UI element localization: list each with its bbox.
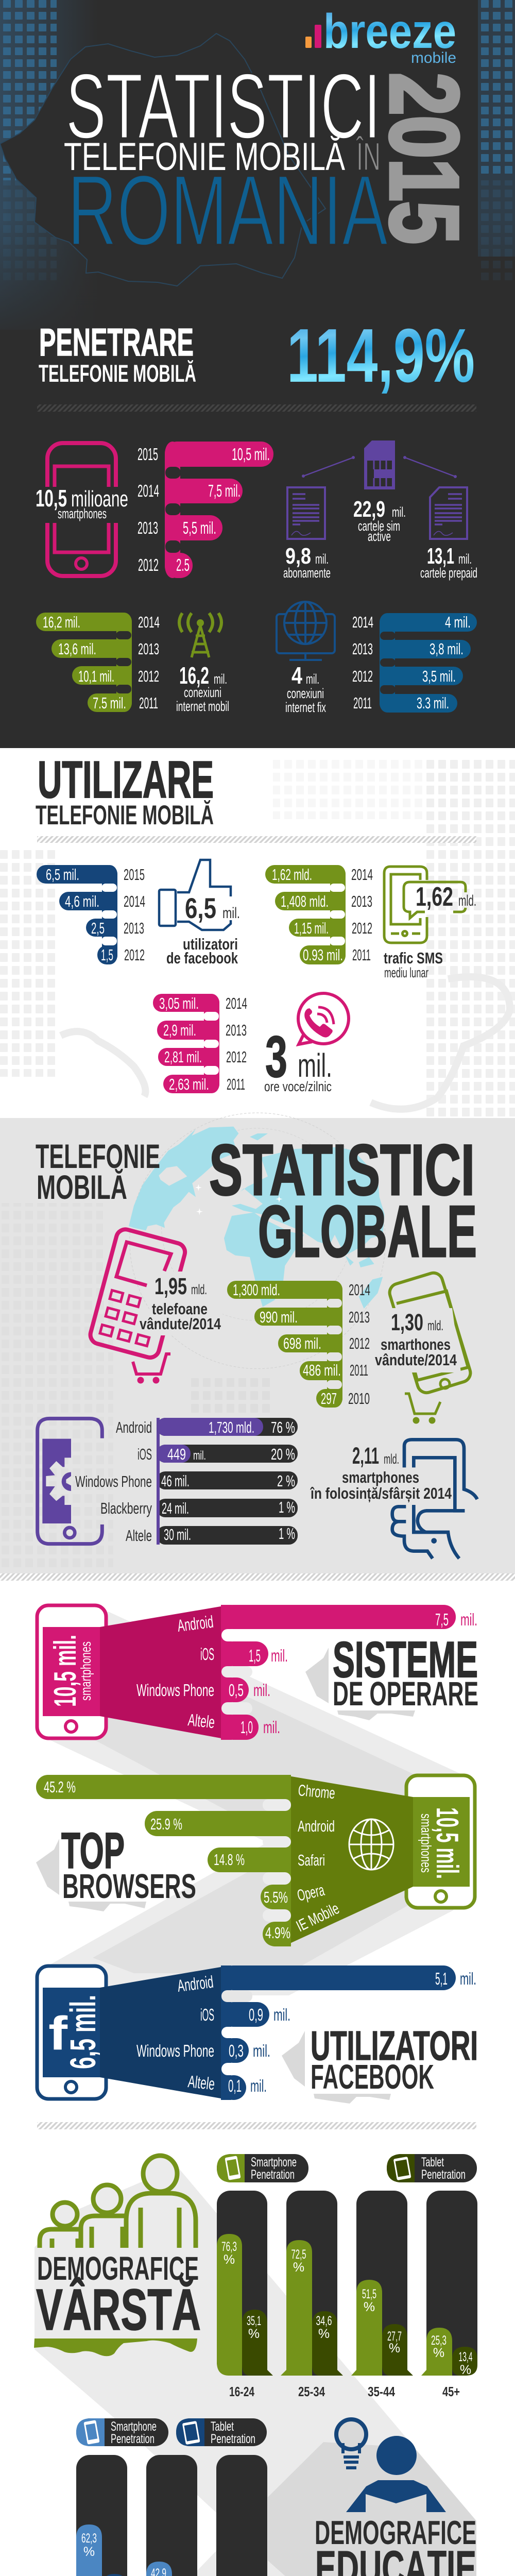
operating systems chart: 0,5 xyxy=(229,1681,244,1700)
operating systems chart: mil. xyxy=(253,1681,270,1700)
icon: phone call bubble xyxy=(298,993,349,1044)
text: smartphones in use: în folosință/sfârșit 2014 xyxy=(310,1484,452,1502)
legend: education chart: Smartphone xyxy=(111,2419,157,2434)
facebook chart: 5,1 xyxy=(435,1969,448,1988)
text: conexiuni internet fix: conexiuni xyxy=(287,686,324,701)
heading: demografice varsta: DEMOGRAFICE xyxy=(37,2250,199,2287)
bar chart: operating system share: 1,730 mld. xyxy=(209,1418,254,1436)
text: conexiuni internet fix xyxy=(285,662,326,715)
legend: age chart: Penetration xyxy=(251,2167,295,2182)
bar chart: age groups: 34,6 xyxy=(316,2314,332,2328)
bar chart: smartphones by year: 7,5 mil. xyxy=(208,481,241,500)
logo: breeze mobile xyxy=(305,4,456,66)
bar chart: smartphones by year: 2.5 xyxy=(176,555,190,574)
icon: globe on monitor xyxy=(277,602,335,660)
text: cartele prepaid: cartele prepaid xyxy=(420,565,477,581)
icon: phone with message bubble: mld. xyxy=(458,892,476,909)
map silhouette behind heading xyxy=(305,1648,415,1720)
facebook chart: mil. xyxy=(273,2005,290,2024)
heading: top browsers xyxy=(61,1822,196,1906)
bar chart: education: 62,3 xyxy=(81,2531,97,2546)
browsers chart: 14.8 % xyxy=(214,1851,245,1869)
bar chart: SMS traffic: 0.93 mil. xyxy=(303,946,343,964)
legend: education chart: Penetration xyxy=(111,2432,154,2446)
icon: smartphone with cart: mld. xyxy=(427,1318,443,1333)
text: utilizatori de facebook: de facebook xyxy=(166,949,238,967)
heading: telefonie mobila xyxy=(36,1137,160,1206)
title xyxy=(64,55,478,266)
text: trafic SMS: mediu lunar xyxy=(384,965,428,980)
browsers chart: 25.9 % xyxy=(150,1815,182,1833)
bar chart: voice traffic: 2,63 mil. xyxy=(169,1075,209,1093)
heading: utilizatori facebook: FACEBOOK xyxy=(311,2058,434,2096)
bar chart: mobile internet: 2013 xyxy=(138,640,159,658)
Romania map outline xyxy=(0,33,325,286)
map silhouette behind heading xyxy=(282,2031,391,2104)
bar chart: age groups: 35-44 xyxy=(368,2384,395,2399)
browsers chart: IE Mobile xyxy=(294,1899,342,1935)
bar chart: education xyxy=(76,2455,273,2576)
heading: penetrare: TELEFONIE MOBILĂ xyxy=(39,360,196,387)
text: cartele prepaid xyxy=(420,544,477,581)
icon: phone with message bubble: 1,62 xyxy=(416,882,453,912)
bar chart: operating system share: 1 % xyxy=(279,1498,295,1516)
legend: education chart: Tablet xyxy=(211,2419,234,2434)
heading: utilizatori facebook xyxy=(311,2023,478,2096)
icon: thumbs up with value xyxy=(159,860,240,930)
bar chart: facebook users by year: 2014 xyxy=(124,892,145,910)
title: TELEFONIE MOBILĂ xyxy=(64,135,345,179)
bar chart: fixed internet: 2012 xyxy=(352,667,373,685)
heading: utilizare: UTILIZARE xyxy=(38,751,214,809)
bar chart: smartphones by year: 2012 xyxy=(138,555,159,574)
bar chart: voice traffic: 3,05 mil. xyxy=(159,994,199,1012)
bar chart: smartphones sold: 486 mil. xyxy=(303,1361,341,1379)
text: 3 mil. ore voce / zilnic: ore voce/zilnic xyxy=(264,1079,332,1094)
icon: pink smartphone: smartphones xyxy=(78,1641,94,1701)
bar chart: age groups: 16-24 xyxy=(229,2384,254,2399)
title: ÎN xyxy=(356,135,381,179)
icon: feature phone with cart xyxy=(89,1227,222,1384)
text: utilizatori de facebook: utilizatori xyxy=(183,935,238,953)
bar chart: mobile internet: 13,6 mil. xyxy=(58,640,96,658)
text: cartele sim active: 22,9 xyxy=(353,497,385,522)
icon: thumbs up with value: mil. xyxy=(222,905,240,922)
bar chart: age groups: % xyxy=(460,2363,471,2377)
operating systems chart: Android xyxy=(176,1612,214,1635)
bar chart: smartphones sold: 2010 xyxy=(348,1389,370,1408)
icon: feature phone with cart: telefoane xyxy=(152,1300,208,1318)
bar chart: age groups: % xyxy=(224,2252,235,2267)
bar chart: fixed internet xyxy=(352,613,477,713)
icon: hand holding smartphone xyxy=(392,1439,477,1558)
operating systems chart: Altele xyxy=(187,1710,216,1732)
text: abonamente: abonamente xyxy=(283,565,331,581)
bar chart: smartphones by year: 10,5 mil. xyxy=(232,445,270,464)
map silhouette behind heading xyxy=(36,1839,146,1911)
bar chart: voice traffic: 2014 xyxy=(226,994,247,1012)
bar chart: operating system share: 76 % xyxy=(271,1418,295,1436)
bar chart: SMS traffic: 1,15 mil. xyxy=(294,919,329,937)
legend: age chart: Tablet xyxy=(421,2155,444,2170)
bar chart: mobile internet: 16,2 mil. xyxy=(43,613,80,631)
heading: telefonie mobila: MOBILĂ xyxy=(37,1168,127,1206)
bar chart: age groups: % xyxy=(248,2327,260,2341)
operating systems chart: iOS xyxy=(200,1645,214,1664)
icon: green smartphone: smartphones xyxy=(418,1814,434,1873)
legend: age chart: Penetration xyxy=(421,2167,466,2182)
bar chart: fixed internet: 4 mil. xyxy=(445,613,471,631)
bar chart: voice traffic: 2012 xyxy=(226,1048,247,1066)
bar chart: smartphones sold: 990 mil. xyxy=(260,1308,298,1326)
bar chart: fixed internet: 3.3 mil. xyxy=(417,694,449,712)
heading: statistici globale xyxy=(209,1129,477,1273)
heading: demografice varsta: VÂRSTĂ xyxy=(36,2277,201,2342)
bar chart: SMS traffic: 2011 xyxy=(352,946,371,964)
text: conexiuni internet mobil xyxy=(176,662,229,714)
browsers chart: 45.2 % xyxy=(44,1778,76,1796)
bar chart: operating system share xyxy=(75,1418,298,1545)
icon: family xyxy=(40,2156,196,2248)
bar chart: operating system share: 30 mil. xyxy=(164,1526,191,1544)
icon: SIM card with connectors xyxy=(302,440,457,489)
bar chart: smartphones by year xyxy=(138,442,273,578)
icon: prepaid document xyxy=(430,487,467,539)
bar chart: mobile internet: 2012 xyxy=(138,667,159,685)
browsers chart: Android xyxy=(298,1817,335,1835)
icon: pink smartphone: 10,5 mil. xyxy=(48,1635,82,1707)
panel: utilizare xyxy=(0,748,515,1118)
icon: smartphone outline with total: smartphones xyxy=(58,506,107,521)
panel: header and penetration, dark xyxy=(0,0,515,748)
text: cartele sim active: mil. xyxy=(392,504,406,520)
heading: telefonie mobila: TELEFONIE xyxy=(36,1137,160,1175)
text: cartele prepaid: 13,1 xyxy=(427,544,454,569)
operating systems chart: 1,5 xyxy=(249,1646,261,1665)
title: 2015 xyxy=(370,73,478,244)
bar chart: smartphones sold: 2014 xyxy=(349,1281,370,1299)
browsers chart: 4.9% xyxy=(265,1924,290,1942)
panel: statistici globale xyxy=(0,1113,515,1573)
heading: penetrare xyxy=(39,320,196,387)
bar chart: operating system share: Altele xyxy=(126,1527,152,1545)
operating systems chart xyxy=(37,1605,477,1740)
bar chart: smartphones sold: 698 mil. xyxy=(283,1334,321,1352)
facebook chart: mil. xyxy=(253,2041,270,2060)
bar chart: SMS traffic: 1,62 mld. xyxy=(272,866,312,884)
operating systems chart: 7,5 xyxy=(435,1610,449,1629)
bar chart: SMS traffic: 1,408 mld. xyxy=(281,892,329,910)
bar chart: age groups: 27,7 xyxy=(387,2329,402,2344)
icon: feature phone with cart: mld. xyxy=(191,1282,207,1297)
text: abonamente xyxy=(283,544,331,581)
legend: education chart xyxy=(76,2418,267,2446)
bar chart: fixed internet: 3,8 mil. xyxy=(430,640,464,658)
icon: smartphone with cart: 1,30 xyxy=(391,1309,423,1335)
bar chart: age groups: 45+ xyxy=(442,2384,460,2399)
bar chart: mobile internet xyxy=(36,613,160,712)
operating systems chart: mil. xyxy=(263,1718,280,1737)
text: conexiuni internet mobil: conexiuni xyxy=(184,685,221,700)
text: abonamente: mil. xyxy=(315,551,329,567)
text: abonamente: 9,8 xyxy=(285,544,311,569)
icon: contract document xyxy=(287,487,325,539)
operating systems chart: Windows Phone xyxy=(136,1681,214,1700)
bar chart: operating system share: 20 % xyxy=(271,1445,295,1463)
icon: smartphone outline with total: 10,5 xyxy=(36,485,67,512)
heading: demografice educatie xyxy=(315,2514,476,2576)
icon: green smartphone xyxy=(406,1775,475,1908)
bar chart: voice traffic xyxy=(153,994,247,1093)
text: smartphones in use: smartphones xyxy=(342,1468,419,1486)
bar chart: voice traffic: 2,81 mil. xyxy=(164,1048,202,1066)
panel: operating systems, browsers, facebook xyxy=(0,1581,515,2133)
bar chart: SMS traffic: 2013 xyxy=(351,892,372,910)
text: 3 mil. ore voce / zilnic: 3 xyxy=(265,1024,287,1090)
bar chart: smartphones by year: 2014 xyxy=(138,481,159,500)
icon: smartphone with cart xyxy=(373,1270,473,1424)
bar chart: fixed internet: 2013 xyxy=(352,640,373,658)
browsers chart xyxy=(36,1775,475,1946)
icon: smartphone with cart: vândute/2014 xyxy=(375,1351,457,1369)
text: conexiuni internet mobil: mil. xyxy=(214,671,227,687)
bar chart: facebook users by year: 2013 xyxy=(124,919,144,937)
bar chart: facebook users by year: 6,5 mil. xyxy=(46,866,79,884)
bar chart: smartphones sold: 2012 xyxy=(349,1334,370,1352)
icon: phone with message bubble xyxy=(384,867,476,943)
legend: age chart: Smartphone xyxy=(251,2155,297,2170)
bar chart: facebook users by year: 2,5 xyxy=(91,919,105,937)
icon: blue smartphone with f: 6,5 mil. xyxy=(63,1995,103,2069)
bar chart: age groups: 25,3 xyxy=(431,2333,447,2348)
bar chart: operating system share: Blackberry xyxy=(100,1499,152,1517)
bar chart: facebook users by year: 4,6 mil. xyxy=(65,892,99,910)
icon: pink smartphone xyxy=(37,1605,106,1738)
bar chart: age groups xyxy=(217,2191,477,2399)
bar chart: facebook users by year: 1,5 xyxy=(101,946,113,964)
bar chart: smartphones sold: 2011 xyxy=(350,1361,368,1379)
icon: antenna tower xyxy=(179,613,221,657)
icon: green smartphone: 10,5 mil. xyxy=(430,1807,465,1879)
bar chart: operating system share: 1 % xyxy=(279,1524,295,1543)
bar chart: smartphones sold: 297 xyxy=(321,1389,337,1408)
bar chart: age groups: 35,1 xyxy=(247,2314,261,2328)
text: smartphones in use: 2,11 xyxy=(352,1443,379,1469)
bar chart: voice traffic: 2,9 mil. xyxy=(163,1021,196,1039)
logo: breeze mobile: breeze xyxy=(323,4,456,59)
facebook chart: 0,3 xyxy=(229,2041,244,2060)
operating systems chart: mil. xyxy=(271,1646,288,1665)
browsers chart: Safari xyxy=(298,1851,325,1869)
facebook chart: mil. xyxy=(250,2076,267,2095)
operating systems chart: mil. xyxy=(460,1610,477,1629)
text: utilizatori de facebook xyxy=(166,935,238,967)
facebook chart: Android xyxy=(176,1972,214,1995)
operating systems chart: 1,0 xyxy=(241,1718,253,1737)
bar chart: operating system share: Windows Phone xyxy=(75,1472,152,1490)
text: cartele prepaid: mil. xyxy=(458,551,472,567)
icon: globe xyxy=(349,1819,393,1870)
facebook chart xyxy=(37,1965,476,2100)
icon: blue smartphone with f: f xyxy=(48,2007,67,2060)
heading: demografice varsta xyxy=(36,2250,201,2342)
bar chart: mobile internet: 2011 xyxy=(139,694,158,712)
bar chart: smartphones by year: 2015 xyxy=(138,445,158,464)
icon: smartphone outline with total xyxy=(34,443,130,576)
bar chart: age groups: % xyxy=(433,2346,444,2360)
bar chart: voice traffic: 2011 xyxy=(227,1075,245,1093)
bar chart: SMS traffic: 2012 xyxy=(352,919,372,937)
bar chart: smartphones by year: 5,5 mil. xyxy=(183,518,216,537)
heading: sisteme de operare xyxy=(333,1631,478,1713)
text: smartphones in use xyxy=(310,1443,452,1502)
bar chart: facebook users by year: 2012 xyxy=(124,946,145,964)
globe illustration xyxy=(129,1113,385,1369)
icon: feature phone with cart: 1,95 xyxy=(154,1273,187,1299)
logo: breeze mobile: mobile xyxy=(411,49,456,66)
bar chart: age groups: 72,5 xyxy=(291,2247,306,2262)
text: conexiuni internet mobil: 16,2 xyxy=(179,662,209,689)
bar chart: operating system share: 2 % xyxy=(277,1472,295,1490)
bar chart: smartphones by year: 2013 xyxy=(138,518,158,537)
facebook chart: Windows Phone xyxy=(136,2041,214,2060)
bar chart: age groups: % xyxy=(293,2260,304,2275)
bar chart: mobile internet: 10,1 mil. xyxy=(78,667,114,685)
heading: penetrare: PENETRARE xyxy=(39,320,194,364)
bar chart: age groups: % xyxy=(318,2327,330,2341)
bar chart: SMS traffic: 2014 xyxy=(351,866,373,884)
bar chart: fixed internet: 3,5 mil. xyxy=(422,667,456,685)
bar chart: age groups: % xyxy=(389,2341,400,2355)
text: trafic SMS: trafic SMS xyxy=(384,949,443,967)
browsers chart: 5.5% xyxy=(264,1888,288,1906)
icon: person reading with light bulb xyxy=(336,2419,446,2512)
text: conexiuni internet fix: 4 xyxy=(291,662,302,689)
facebook chart: mil. xyxy=(460,1969,476,1988)
icon: blue smartphone with f xyxy=(37,1966,106,2099)
bar chart: fixed internet: 2011 xyxy=(353,694,372,712)
bar chart: mobile internet: 2014 xyxy=(138,613,160,631)
bar chart: age groups: % xyxy=(364,2300,375,2314)
text: trafic SMS xyxy=(384,949,443,980)
bar chart: smartphones sold xyxy=(227,1281,370,1408)
bar chart: operating system share: 46 mil. xyxy=(161,1472,190,1490)
legend: education chart: Penetration xyxy=(211,2432,255,2446)
text: cartele sim active: cartele sim xyxy=(358,518,400,534)
bar chart: fixed internet: 2014 xyxy=(352,613,373,631)
bar chart: voice traffic: 2013 xyxy=(226,1021,247,1039)
bar chart: operating system share: 24 mil. xyxy=(162,1499,189,1517)
bar chart: operating system share: mil. xyxy=(193,1449,206,1463)
bar chart: mobile internet: 7.5 mil. xyxy=(93,694,126,712)
bar chart: education: % xyxy=(83,2545,95,2559)
green map base xyxy=(34,2338,197,2356)
text: cartele sim active xyxy=(353,497,406,544)
text: cartele sim active: active xyxy=(368,529,391,544)
icon: smartphone with cart: smarthones xyxy=(381,1335,451,1353)
bar chart: operating system share: Android xyxy=(116,1418,152,1436)
heading: top browsers: BROWSERS xyxy=(62,1867,196,1906)
text: 3 mil. ore voce / zilnic: mil. xyxy=(298,1047,332,1084)
heading: top browsers: TOP xyxy=(61,1822,125,1879)
facebook chart: Altele xyxy=(187,2072,216,2093)
icon: phone with gear xyxy=(38,1418,102,1544)
text: conexiuni internet fix: mil. xyxy=(306,671,319,687)
bar chart: smartphones sold: 2013 xyxy=(349,1308,370,1326)
bar chart: age groups: 13,4 xyxy=(458,2350,473,2364)
heading: utilizare xyxy=(36,751,214,831)
facebook chart: 0,1 xyxy=(228,2076,242,2095)
icon: smartphone outline with total: milioane xyxy=(71,486,128,512)
bar chart: operating system share: 449 xyxy=(167,1445,186,1463)
facebook chart: 0,9 xyxy=(249,2005,263,2024)
bar chart: operating system share: iOS xyxy=(138,1445,152,1463)
text: smartphones in use: mld. xyxy=(384,1451,399,1467)
legend: age chart xyxy=(217,2154,477,2182)
panel: demographics xyxy=(0,2133,515,2576)
bar chart: age groups: 25-34 xyxy=(298,2384,325,2399)
text: conexiuni internet fix: internet fix xyxy=(285,700,326,715)
bar chart: age groups: 51,5 xyxy=(362,2287,376,2301)
bar chart: facebook users by year xyxy=(37,865,145,964)
icon: thumbs up with value: 6,5 xyxy=(185,892,216,924)
bar chart: SMS traffic xyxy=(265,865,373,964)
text: conexiuni internet mobil: internet mobil xyxy=(176,699,229,714)
text: 3 mil. ore voce / zilnic xyxy=(264,1024,332,1094)
bar chart: facebook users by year: 2015 xyxy=(124,866,145,884)
bar chart: age groups: 76,3 xyxy=(221,2240,237,2254)
heading: utilizare: TELEFONIE MOBILĂ xyxy=(36,800,214,831)
browsers chart: Opera xyxy=(296,1881,327,1905)
icon: feature phone with cart: vândute/2014 xyxy=(140,1315,221,1333)
facebook chart: iOS xyxy=(200,2005,214,2024)
browsers chart: Chrome xyxy=(297,1781,336,1802)
bar chart: smartphones sold: 1,300 mld. xyxy=(233,1281,280,1299)
